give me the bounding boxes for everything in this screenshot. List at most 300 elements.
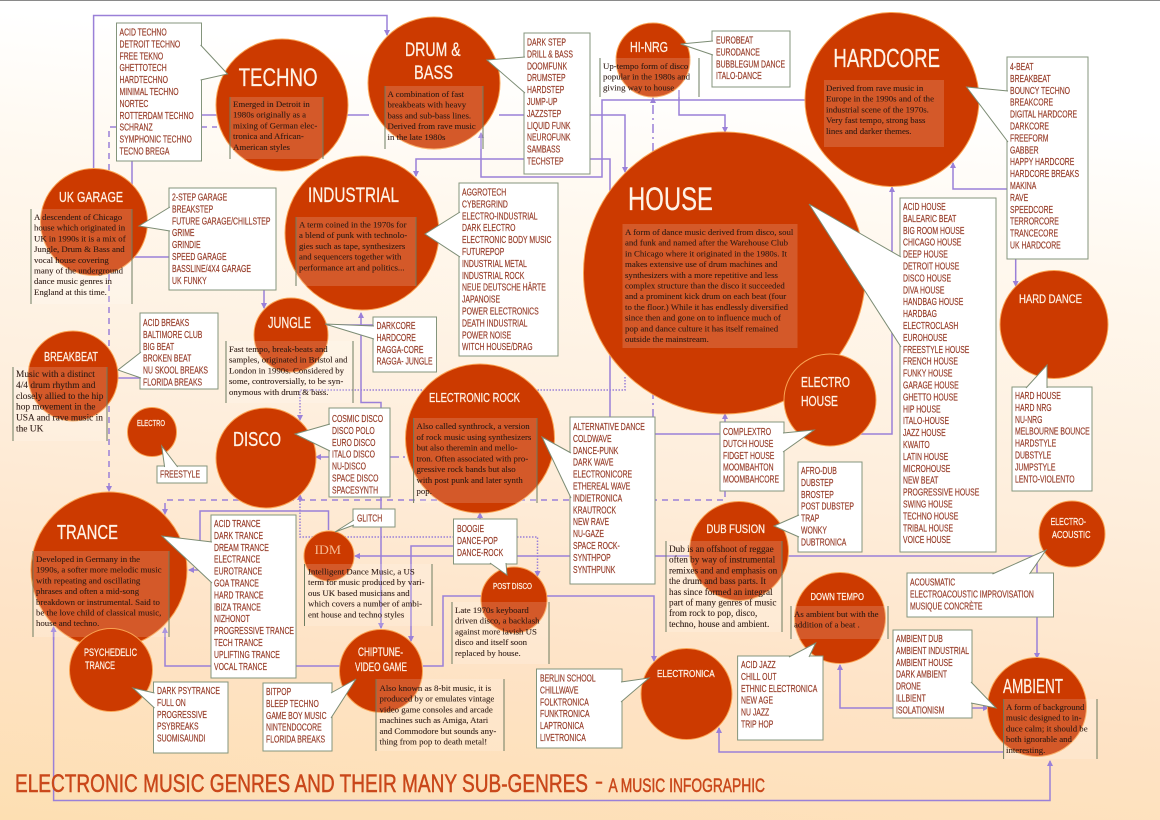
list: ambient sub-genres (893, 630, 996, 718)
list: electronic rock sub-genres: NU-GAZE (573, 528, 604, 539)
arrow: dash-dot house to hi-NRG (652, 98, 654, 418)
description: industrial: a blend of punk with technolo- (299, 230, 407, 240)
description: drum and bass: Derived from rave music (388, 121, 476, 131)
list: industrial sub-genres: CYBERGRIND (462, 198, 508, 210)
list: breakbeat sub-genres: BROKEN BEAT (143, 352, 192, 364)
list: dub fusion sub-genres: BROSTEP (801, 488, 834, 500)
list: drum and bass sub-genres: LIQUID FUNK (527, 119, 571, 131)
heading: hard dance: HARD DANCE (1019, 292, 1082, 306)
list: hard dance sub-genres: HARD HOUSE (1015, 390, 1061, 401)
arrow: breakbeat list link (107, 377, 141, 379)
description: jungle: samples, originated in Bristol and (229, 355, 348, 365)
list: UK garage sub-genres: GRIME (172, 227, 195, 239)
description: IDM: Intelligent Dance Music, a US (308, 566, 415, 576)
arrow head: bottom line into trance (53, 627, 55, 640)
list: electronic rock sub-genres: KRAUTROCK (573, 504, 616, 516)
description: house: and funk and named after the Warehouse Club (625, 238, 789, 248)
genre: techno (116, 23, 348, 171)
description: hi-NRG: popular in the 1980s and (603, 72, 691, 82)
list: post disco sub-genres: BOOGIE (457, 523, 484, 534)
heading: techno: TECHNO (239, 64, 318, 92)
arrow: hardcore list to hard dance (1015, 259, 1017, 286)
list: house sub-genres: CHICAGO HOUSE (903, 236, 961, 248)
arrow: drum and bass list to electronic rock list (590, 159, 610, 418)
list: drum and bass sub-genres: DOOMFUNK (527, 60, 567, 72)
description: hardcore: lines and darker themes. (826, 126, 912, 136)
list: industrial sub-genres: POWER NOISE (462, 329, 511, 341)
description: electronic rock: gressive rock bands but also (416, 464, 516, 474)
arrow: hardcore list to hardcore (953, 163, 1008, 189)
list: breakbeat sub-genres: BIG BEAT (143, 340, 175, 352)
list: hardcore sub-genres: TRANCECORE (1010, 227, 1058, 239)
arrow: techno to drum and bass (201, 114, 525, 116)
heading: dub fusion: DUB FUSION (706, 522, 765, 536)
genre: electro (128, 408, 207, 483)
list: trance sub-genres: UPLIFTING TRANCE (214, 648, 280, 660)
heading: drum and bass (405, 40, 461, 84)
list: hardcore sub-genres: FREEFORM (1010, 132, 1049, 144)
description: dub fusion: remixes and and emphasis on (669, 565, 778, 575)
genre: ambient (893, 630, 1097, 759)
heading: psychedelic trance: PSYCHEDELIC (84, 647, 137, 659)
list: house sub-genres: GARAGE HOUSE (903, 379, 959, 391)
list: down tempo sub-genres: NEW AGE (741, 694, 773, 706)
list: psychedelic trance sub-genres: SUOMISAUNDI (157, 732, 205, 744)
description: ambient (1004, 699, 1097, 759)
description: chiptune: and Commodore but sounds any- (380, 726, 496, 736)
list: industrial sub-genres: FUTUREPOP (462, 246, 504, 257)
list: industrial sub-genres: WITCH HOUSE/DRAG (462, 341, 533, 353)
list: hi-NRG sub-genres: EUROBEAT (716, 34, 754, 46)
description: house: pop and dance culture it has itself remained (625, 323, 779, 333)
arrow: ambient to electronica (719, 728, 1003, 752)
description: ambient: music designed to in- (1006, 713, 1082, 723)
list: drum and bass sub-genres (487, 33, 590, 174)
list: electro house sub-genres: DUTCH HOUSE (723, 437, 773, 449)
title: - (595, 771, 603, 793)
genre: industrial (285, 156, 558, 356)
description: drum and bass: breakbeats with heavy (388, 100, 467, 110)
description: house (622, 224, 798, 348)
heading: chiptune and video game: VIDEO GAME (355, 660, 407, 674)
list: house sub-genres: FRENCH HOUSE (903, 355, 958, 367)
list: psychedelic trance sub-genres: PSYBREAKS (157, 720, 199, 732)
list: electro house sub-genres: FIDGET HOUSE (723, 449, 774, 461)
description: house: A form of dance music derived from disco, soul (625, 227, 794, 237)
list: industrial sub-genres: NEUE DEUTSCHE HÄRTE (462, 281, 546, 293)
list: dub fusion sub-genres: AFRO-DUB (801, 465, 837, 476)
arrow: ambient list to ambient (972, 707, 988, 709)
heading: electro-acoustic: ELECTRO- (1051, 517, 1086, 528)
description: UK garage: house which originated in (34, 223, 126, 233)
description: trance: Developed in Germany in the (36, 554, 140, 564)
description: post disco: disco and itself soon (455, 637, 528, 647)
list: house sub-genres: TECHNO HOUSE (903, 510, 958, 522)
list: ambient sub-genres: AMBIENT HOUSE (896, 656, 953, 668)
list: breakbeat sub-genres: NU SKOOL BREAKS (143, 364, 208, 376)
list: UK garage sub-genres: GRINDIE (172, 239, 201, 250)
list: industrial sub-genres: AGGROTECH (462, 186, 506, 198)
list: hardcore sub-genres: BOUNCY TECHNO (1010, 84, 1070, 96)
arrow: dashed electro house list to trance (165, 491, 725, 514)
description: techno: Emerged in Detroit in (233, 99, 310, 109)
list: house sub-genres: ACID HOUSE (903, 201, 946, 212)
list: ambient sub-genres: ISOLATIONISM (896, 704, 944, 716)
list: house sub-genres: BALEARIC BEAT (903, 212, 957, 224)
arrow: electronic rock list to complextro list (655, 433, 721, 435)
list: hard dance sub-genres: DUBSTYLE (1015, 449, 1051, 461)
list: techno sub-genres: GHETTOTECH (120, 62, 167, 74)
description: hardcore: Very fast tempo, strong bass (826, 115, 926, 125)
list: electronic rock sub-genres: DARK WAVE (573, 456, 614, 468)
genre: dub fusion (666, 462, 862, 632)
heading: jungle: JUNGLE (268, 315, 311, 332)
description: UK garage: A descendent of Chicago (34, 212, 123, 222)
description: IDM: ent house and techno styles (308, 609, 405, 619)
list: techno sub-genres: ACID TECHNO (120, 26, 167, 38)
arrow: jungle list to industrial (326, 313, 373, 325)
description: chiptune: video game consoles and arcade (380, 704, 493, 714)
list: house sub-genres: DISCO HOUSE (903, 272, 951, 284)
list: drum and bass sub-genres: NEUROFUNK (527, 131, 571, 143)
heading: psychedelic trance (84, 647, 137, 672)
genre: post disco (452, 519, 549, 664)
list: house sub-genres: HANDBAG HOUSE (903, 296, 963, 308)
list: trance sub-genres: EUROTRANCE (214, 565, 262, 577)
list: electro-acoustic sub-genres: ELECTROACOUSTIC IMPROVISATION (910, 588, 1034, 600)
arrow: ambient list to down tempo (840, 665, 893, 708)
description: electronic rock: but also theremin and mello- (416, 443, 518, 453)
list: techno sub-genres: MINIMAL TECHNO (120, 86, 179, 97)
list: hard dance sub-genres: HARDSTYLE (1015, 437, 1056, 449)
heading: electronic rock: ELECTRONIC ROCK (429, 390, 520, 405)
description: house: complex structure than the disco it succeeded (625, 280, 785, 290)
list: electronic rock sub-genres: SYNTHPUNK (573, 563, 615, 575)
heading: electro-acoustic (1051, 517, 1090, 541)
list: techno sub-genres (116, 23, 228, 161)
genre: breakbeat (13, 313, 218, 441)
genre: hardcore (805, 12, 1088, 259)
list: UK garage sub-genres (139, 188, 276, 290)
list: electronic rock sub-genres: ELECTRONICORE (573, 468, 632, 480)
list: techno sub-genres: NORTEC (120, 97, 149, 109)
description: IDM: ous UK based musicians and (308, 588, 410, 598)
list: techno sub-genres: FREE TEKNO (120, 50, 163, 62)
list: dub fusion sub-genres: DUBTRONICA (801, 536, 846, 548)
list: electronic rock sub-genres: COLDWAVE (573, 432, 612, 444)
description: techno: American styles (233, 142, 290, 152)
list: electro-acoustic sub-genres (907, 550, 1054, 617)
description: house: to the floor.) While it has endlessly diversified (625, 302, 789, 312)
list: chiptune sub-genres: NINTENDOCORE (266, 721, 322, 733)
description: post disco (452, 602, 549, 664)
list: down tempo sub-genres: TRIP HOP (741, 718, 773, 730)
description: dub fusion: from rock to pop, disco, (669, 608, 757, 618)
description: chiptune: Also known as 8-bit music, it is (380, 683, 492, 693)
arrow: hi-NRG to house (679, 90, 725, 132)
list: drum and bass sub-genres: DARK STEP (527, 36, 566, 48)
description: hardcore: Derived from rave music in (826, 83, 924, 93)
arrow: trance list to chiptune (296, 665, 341, 667)
list: disco sub-genres: SPACESYNTH (332, 484, 378, 496)
list: hard dance sub-genres (1012, 365, 1092, 491)
genre: electronic rock (406, 364, 655, 584)
description: chiptune (376, 679, 504, 751)
list: jungle sub-genres: DARKCORE (376, 320, 415, 331)
list: trance sub-genres: NIZHONOT (214, 613, 250, 625)
list: house sub-genres: FUNKY HOUSE (903, 367, 953, 379)
list: electro house sub-genres (720, 422, 814, 491)
list: drum and bass sub-genres: JUMP-UP (527, 96, 558, 107)
list: down tempo sub-genres: ETHNIC ELECTRONICA (741, 682, 817, 694)
description: UK garage: England at this time. (34, 287, 107, 297)
list: house sub-genres: GHETTO HOUSE (903, 391, 958, 403)
description: industrial: and sequencers together with (299, 252, 402, 262)
description: hi-NRG (600, 58, 699, 97)
list: hard dance sub-genres: MELBOURNE BOUNCE (1015, 425, 1090, 437)
description: breakbeat (13, 367, 107, 441)
genre: IDM (304, 509, 432, 626)
list: hardcore sub-genres: UK HARDCORE (1010, 239, 1061, 251)
list: house sub-genres: DEEP HOUSE (903, 248, 948, 260)
list: drum and bass sub-genres: DRUMSTEP (527, 72, 566, 84)
heading: electro: ELECTRO (137, 419, 165, 428)
heading: hi-NRG: HI-NRG (630, 39, 668, 56)
list: hardcore sub-genres: 4-BEAT (1010, 61, 1034, 72)
list: jungle sub-genres (325, 317, 436, 372)
genre: trance (31, 492, 296, 678)
arrow: disco list to disco (316, 456, 330, 458)
description: industrial: performance art and politics... (299, 262, 405, 272)
description: breakbeat: hop movement in the (16, 403, 95, 413)
list: UK garage sub-genres: BREAKSTEP (172, 203, 213, 215)
list: jungle sub-genres: HARDCORE (376, 331, 416, 343)
list: IDM sub-genres: GLITCH (357, 512, 382, 524)
list: hardcore sub-genres: HARDCORE BREAKS (1010, 168, 1079, 179)
list: hard dance sub-genres: LENTO-VIOLENTO (1015, 473, 1075, 485)
description: UK garage: dance music genres in (34, 276, 113, 286)
description: ambient: duce calm; it should be (1006, 723, 1088, 733)
description: jungle (226, 341, 353, 403)
list: electronic rock sub-genres: SPACE ROCK- (573, 540, 620, 551)
list: trance sub-genres: IBIZA TRANCE (214, 601, 261, 613)
list: hardcore sub-genres: TERRORCORE (1010, 215, 1059, 227)
list: house sub-genres: LATIN HOUSE (903, 450, 948, 462)
list: dub fusion sub-genres: TRAP (801, 512, 819, 524)
list: hard dance sub-genres: HARD NRG (1015, 401, 1052, 413)
description: electronic rock (414, 418, 537, 503)
list: hard dance sub-genres: NU-NRG (1015, 413, 1043, 425)
title: ELECTRONIC MUSIC GENRES AND THEIR MANY SUB-GENRES (15, 770, 588, 798)
list: hi-NRG sub-genres (681, 31, 790, 87)
genre: electro-acoustic (907, 501, 1105, 617)
genre: jungle (226, 298, 436, 403)
list: house sub-genres: TRIBAL HOUSE (903, 522, 953, 534)
description: UK garage: Jungle, Drum & Bass and (34, 244, 125, 254)
list: dub fusion sub-genres (774, 462, 862, 552)
list: trance sub-genres: PROGRESSIVE TRANCE (214, 625, 294, 636)
heading: electro-acoustic: ACOUSTIC (1052, 530, 1090, 541)
description: post disco: against more lavish US (455, 626, 537, 636)
heading: drum and bass: DRUM & (405, 40, 461, 61)
description: ambient: interesting. (1006, 745, 1045, 755)
list: disco sub-genres: ITALO DISCO (332, 448, 375, 460)
list: dub fusion sub-genres: DUBSTEP (801, 476, 833, 488)
list: electro-acoustic sub-genres: ACOUSMATIC (910, 576, 956, 588)
arrow: trance list to trance (165, 628, 212, 666)
list: house sub-genres: MICROHOUSE (903, 462, 950, 474)
description: trance: with repeating and oscillating (36, 575, 141, 585)
list: ambient sub-genres: AMBIENT INDUSTRIAL (896, 644, 969, 656)
list: electronic rock sub-genres: ETHEREAL WAVE (573, 480, 630, 492)
list: chiptune sub-genres: GAME BOY MUSIC (266, 709, 327, 721)
title: A MUSIC INFOGRAPHIC (608, 776, 765, 797)
list: electronica sub-genres: FOLKTRONICA (540, 696, 589, 708)
heading: electro house: ELECTRO (801, 374, 850, 391)
genre: drum and bass (368, 17, 590, 174)
description: techno: mixing of German elec- (233, 120, 317, 130)
description: trance: be the love child of classical music, (36, 608, 161, 618)
list: house sub-genres: KWAITO (903, 439, 930, 450)
list: chiptune sub-genres (263, 679, 356, 751)
arrow: disco list to chiptune (380, 497, 382, 628)
list: house sub-genres: NEW BEAT (903, 474, 939, 486)
list: drum and bass sub-genres: HARDSTEP (527, 84, 564, 95)
genre: hi-NRG (600, 23, 790, 97)
list: trance sub-genres: DARK TRANCE (214, 529, 263, 541)
description: drum and bass (385, 86, 483, 149)
list: techno sub-genres: ROTTERDAM TECHNO (120, 109, 194, 121)
heading: drum and bass: BASS (414, 63, 453, 84)
list: house sub-genres: SWING HOUSE (903, 498, 953, 510)
list: hardcore sub-genres: DARKCORE (1010, 120, 1049, 132)
description: jungle: Fast tempo, break-beats and (229, 344, 328, 354)
list: dub fusion sub-genres: WONKY (801, 524, 827, 536)
list: hard dance sub-genres: JUMPSTYLE (1015, 461, 1056, 473)
description: hardcore: Europe in the 1990s and of the (826, 94, 934, 104)
description: house: synthesizers with a more repetitive and less (625, 270, 778, 280)
description: trance: house and techno. (36, 618, 99, 628)
list: jungle sub-genres: RAGGA-CORE (376, 343, 423, 355)
description: techno: tronica and African- (233, 131, 304, 141)
description: UK garage: many of the underground (34, 266, 124, 276)
list: chiptune sub-genres: BLEEP TECHNO (266, 697, 319, 709)
list: trance sub-genres: TECH TRANCE (214, 637, 263, 648)
list: ambient sub-genres: DRONE (896, 680, 921, 692)
description: post disco: replaced by house. (455, 648, 521, 658)
list: house sub-genres: BIG ROOM HOUSE (903, 224, 964, 236)
list: industrial sub-genres (425, 183, 558, 356)
description: post disco: Late 1970s keyboard (455, 605, 529, 615)
genre: psychedelic trance (70, 628, 228, 753)
description: electronic rock: Also called synthrock, a version (416, 421, 530, 431)
list: hardcore sub-genres: MAKINA (1010, 180, 1036, 191)
list: house sub-genres: VOICE HOUSE (903, 534, 951, 546)
arrow: electronic rock list to IDM (355, 555, 571, 557)
list: down tempo sub-genres: NU JAZZ (741, 706, 770, 718)
list: hardcore sub-genres: BREAKBEAT (1010, 72, 1051, 84)
arrow: UK garage list to jungle (263, 290, 265, 308)
list: UK garage sub-genres: SPEED GARAGE (172, 251, 227, 262)
arrow: trance around the page to ambient (54, 628, 1050, 800)
description: hi-NRG: Up-tempo form of disco (603, 61, 689, 71)
list: house sub-genres: HIP HOUSE (903, 403, 941, 415)
list: disco sub-genres: EURO DISCO (332, 436, 376, 448)
heading: industrial: INDUSTRIAL (308, 184, 399, 207)
description: ambient: A form of background (1006, 702, 1085, 712)
list: house sub-genres: EUROHOUSE (903, 331, 947, 343)
list: hi-NRG sub-genres: ITALO-DANCE (716, 70, 762, 82)
list: electronic rock sub-genres: SYNTHPOP (573, 551, 611, 563)
genre: electronica (536, 648, 732, 748)
description: down tempo: addition of a beat . (794, 620, 860, 630)
description: chiptune: thing from pop to death metal! (380, 736, 487, 746)
description: hi-NRG: giving way to house (603, 82, 674, 92)
description: dub fusion: often by way of instrumental (669, 555, 776, 565)
description: techno (230, 97, 323, 159)
list: dub fusion sub-genres: POST DUBSTEP (801, 500, 854, 512)
description: house: and a prominent kick drum on each beat (four (625, 291, 786, 301)
heading: electronica: ELECTRONICA (657, 669, 715, 680)
list: psychedelic trance sub-genres: FULL ON (157, 696, 186, 708)
heading: post disco: POST DISCO (493, 582, 532, 591)
heading: UK garage: UK GARAGE (59, 189, 123, 206)
description: breakbeat: closely allied to the hip (16, 392, 104, 402)
arrow: hardcore to drum and bass (481, 100, 806, 177)
heading: breakbeat: BREAKBEAT (44, 349, 98, 364)
description: house: outside the mainstream. (625, 334, 709, 344)
arrow: drum and bass list to house (590, 115, 625, 172)
description: industrial: A term coined in the 1970s for (299, 220, 407, 230)
arrow: complextro list to house (724, 414, 726, 423)
list: drum and bass sub-genres: TECHSTEP (527, 155, 564, 167)
arrow: IDM to trance (189, 511, 328, 570)
list: house sub-genres: JAZZ HOUSE (903, 427, 946, 438)
genre: electro house (720, 354, 876, 491)
list: post disco sub-genres: DANCE-ROCK (457, 546, 503, 558)
description: dub fusion: Dub is an offshoot of reggae (669, 544, 774, 554)
arrow: dashed techno list link (201, 126, 217, 128)
list: industrial sub-genres: JAPANOISE (462, 293, 500, 305)
description: ambient: both ignorable and (1006, 734, 1073, 744)
list: electronica sub-genres: LAPTRONICA (540, 720, 584, 731)
list: electro house sub-genres: COMPLEXTRO (723, 426, 771, 437)
arrow: dash-dot electronic rock to disco (390, 456, 408, 458)
description: house: makes extensive use of drum machines and (625, 259, 778, 269)
description: electronic rock: with post punk and later synth (416, 475, 523, 485)
list: industrial sub-genres: DEATH INDUSTRIAL (462, 317, 528, 329)
description: drum and bass: bass and sub-bass lines. (388, 110, 471, 120)
list: electronica sub-genres: FUNKTRONICA (540, 708, 590, 720)
description: drum and bass: in the late 1980s (388, 132, 446, 142)
list: trance sub-genres: DREAM TRANCE (214, 541, 269, 553)
list: electronica sub-genres: LIVETRONICA (540, 732, 586, 743)
list: techno sub-genres: SCHRANZ (120, 121, 153, 133)
list: disco sub-genres (295, 408, 390, 497)
arrow: dotted IDM to disco (300, 495, 454, 537)
description: dub fusion: the drum and bass parts. It (669, 576, 766, 586)
list: hardcore sub-genres: GABBER (1010, 144, 1039, 156)
list: chiptune sub-genres: FLORIDA BREAKS (266, 733, 325, 745)
list: ambient sub-genres: ILLBIENT (896, 692, 926, 704)
heading: chiptune and video game (355, 645, 407, 674)
genre: down tempo (738, 572, 888, 740)
list: house sub-genres: DETROIT HOUSE (903, 260, 959, 272)
description: industrial: gies such as tape, synthesizers (299, 241, 406, 251)
description: electronic rock: tron. Often associated with pro- (416, 453, 528, 463)
list: electronic rock sub-genres: NEW RAVE (573, 516, 609, 528)
arrow: dashed techno to trance (109, 127, 116, 491)
